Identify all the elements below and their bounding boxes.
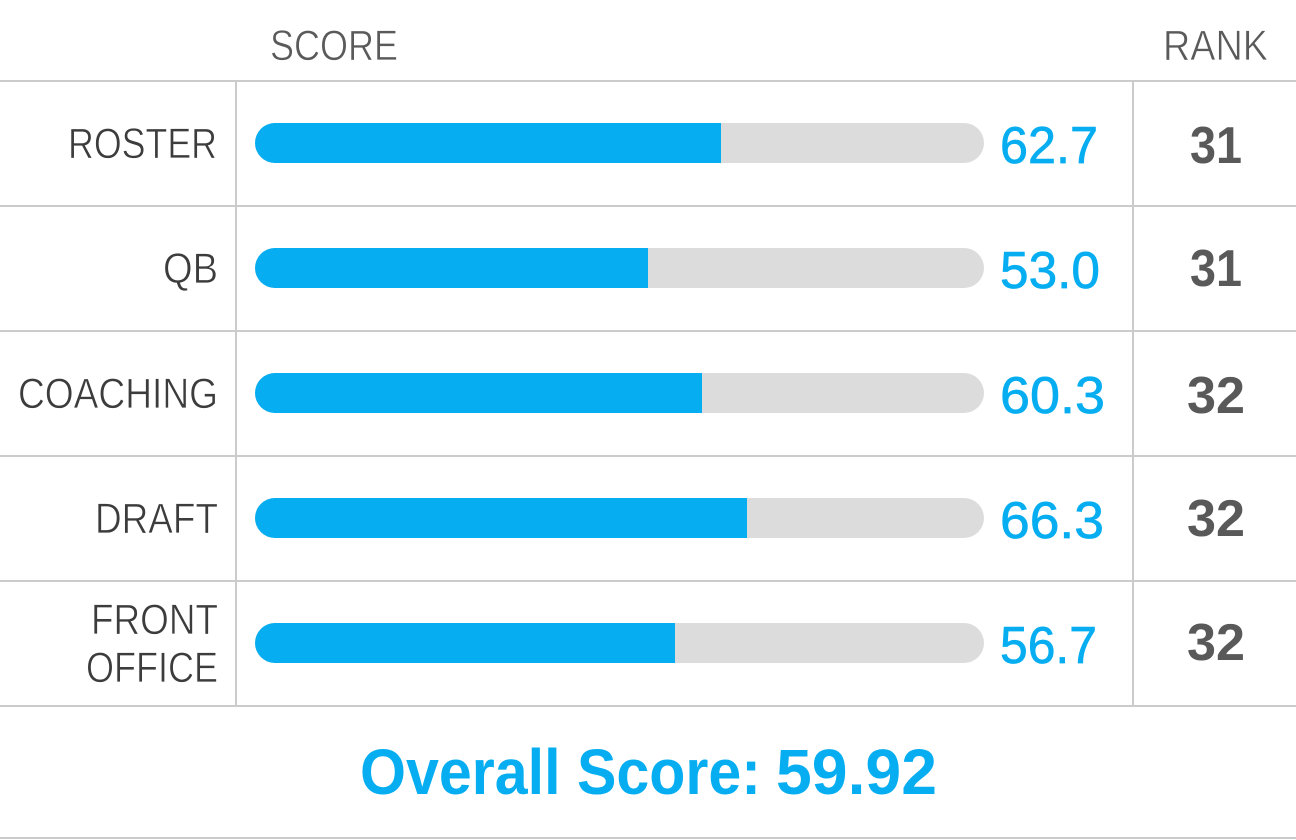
label: coaching: COACHING bbox=[18, 370, 218, 418]
bar: front office 56.7 bbox=[255, 623, 984, 663]
row: draft bbox=[95, 490, 1245, 550]
bar: qb 53.0 bbox=[255, 248, 984, 288]
bar: roster 62.7 bbox=[255, 123, 984, 163]
value: roster score: 62.7 bbox=[1000, 117, 1098, 175]
row: front office bbox=[86, 596, 1245, 692]
rank: front office: 32 bbox=[1187, 614, 1245, 672]
overall score: Overall Score: bbox=[360, 736, 761, 808]
rank: draft: 32 bbox=[1187, 490, 1245, 548]
value: coaching score: 60.3 bbox=[1000, 367, 1105, 425]
overall score: 59.92 bbox=[776, 736, 937, 808]
value: draft score: 66.3 bbox=[1000, 492, 1104, 550]
rank: qb: 31 bbox=[1190, 240, 1242, 298]
header: score: SCORE bbox=[270, 22, 398, 70]
bar: draft 66.3 bbox=[255, 498, 984, 538]
label: roster: ROSTER bbox=[68, 120, 217, 168]
label: front office: OFFICE bbox=[86, 644, 218, 692]
label: qb: QB bbox=[163, 245, 218, 293]
row: roster bbox=[68, 117, 1242, 175]
label: draft: DRAFT bbox=[95, 495, 218, 543]
rank: coaching: 32 bbox=[1187, 367, 1245, 425]
bar: coaching 60.3 bbox=[255, 373, 984, 413]
value: qb score: 53.0 bbox=[1000, 242, 1100, 300]
label: front office bbox=[86, 596, 218, 692]
header: rank: RANK bbox=[1163, 22, 1268, 70]
row: qb bbox=[163, 240, 1242, 300]
value: front office score: 56.7 bbox=[1000, 617, 1097, 675]
label: front office: FRONT bbox=[91, 596, 218, 644]
row: coaching bbox=[18, 367, 1245, 425]
rank: roster: 31 bbox=[1190, 117, 1242, 175]
